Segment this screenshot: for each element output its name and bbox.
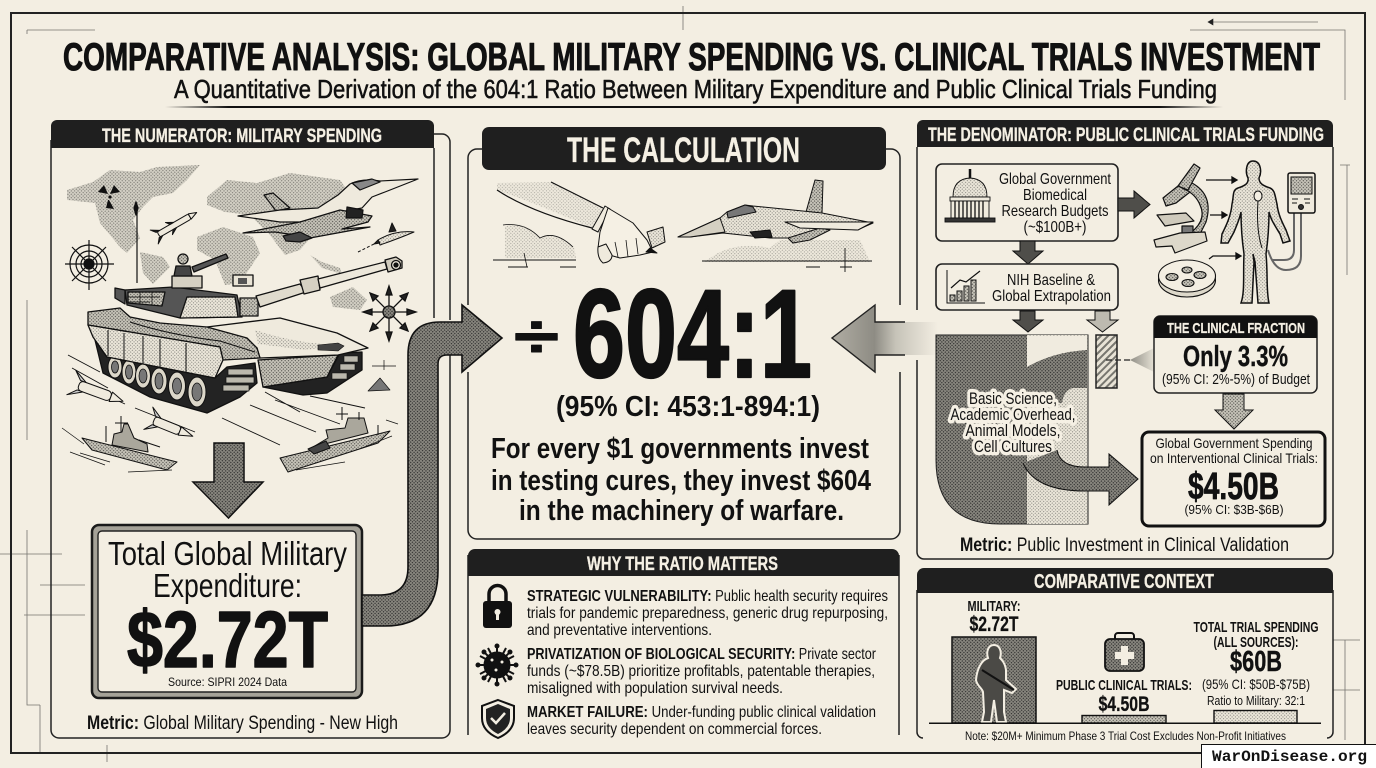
illustration: microscope — [1154, 164, 1208, 253]
box: global government spending: on Interventional Clinical Trials: — [1150, 450, 1318, 466]
box: global budgets: (~$100B+) — [1024, 219, 1086, 236]
arrow: fraction to spending — [1215, 394, 1253, 429]
comparative header — [917, 568, 1333, 593]
symbol: division sign: ÷ — [514, 303, 559, 370]
panel: the numerator — [51, 120, 450, 738]
curved arrow: to public spend — [1023, 450, 1138, 505]
box: global government spending: (95% CI: $3B-$6B) — [1184, 502, 1284, 517]
calculation header — [482, 127, 886, 170]
label: total trial spending — [1194, 619, 1318, 708]
icon: virus — [476, 644, 518, 686]
statement — [491, 433, 871, 527]
illustration: right warship — [280, 407, 398, 472]
bar: total trial spending — [1214, 710, 1297, 723]
label: total trial spending: (95% CI: $50B-$75B) — [1202, 676, 1310, 692]
box: the clinical fraction: THE CLINICAL FRACTION — [1167, 320, 1305, 337]
arrow: denominator to calculation — [832, 305, 938, 372]
illustration: gloved hand — [493, 182, 665, 267]
text: privatization: misaligned with population survival needs. — [527, 680, 783, 697]
dashed arrow: fraction to sliver — [1106, 348, 1154, 372]
box: global government spending — [1142, 432, 1325, 526]
statement: For every $1 governments invest — [491, 433, 869, 465]
illustration: tank — [68, 202, 402, 445]
illustration: small missile upper — [150, 206, 201, 244]
baseline — [929, 722, 1321, 724]
illustration: missile lower left — [67, 370, 127, 414]
panel: comparative context — [917, 568, 1333, 743]
metric: military: Metric: Global Military Spending - New High — [87, 713, 398, 734]
near track — [95, 340, 257, 413]
illustration: fighter jet — [238, 179, 418, 242]
text: basic science label — [950, 390, 1076, 456]
text: strategic vulnerability: and preventative interventions. — [527, 622, 712, 639]
bar: public clinical trials — [1082, 716, 1166, 723]
why header: WHY THE RATIO MATTERS — [587, 554, 778, 575]
label: public clinical trials: $4.50B — [1098, 693, 1150, 716]
text: basic science label: Cell Cultures — [974, 438, 1052, 456]
illustration: cruise missile right — [358, 223, 414, 252]
confidence interval: (95% CI: 453:1-894:1) — [556, 391, 820, 423]
total expenditure box: Total Global Military — [108, 535, 347, 572]
box: global government spending: Global Government Spending — [1156, 435, 1312, 451]
box: NIH baseline: Global Extrapolation — [992, 288, 1111, 305]
bar: military with soldier — [952, 637, 1036, 723]
why header — [468, 549, 899, 576]
text: strategic vulnerability — [527, 588, 888, 639]
subtitle: A Quantitative Derivation of the 604:1 Ratio Between Military Expenditure and Public Clinical Trials Funding — [174, 74, 1217, 104]
total expenditure box: Source: SIPRI 2024 Data — [168, 675, 287, 689]
label: public clinical trials — [1056, 677, 1192, 716]
box: global government spending: $4.50B — [1188, 466, 1279, 508]
box: global budgets: Biomedical — [1023, 187, 1087, 204]
numerator header — [51, 120, 434, 148]
icon: spiked star — [363, 286, 416, 341]
text: strategic vulnerability: trials for pandemic preparedness, generic drug repurposing, — [527, 605, 888, 622]
icon: radiation symbol — [98, 185, 120, 209]
total expenditure box: Expenditure: — [153, 567, 302, 604]
text: strategic vulnerability: STRATEGIC VULNERABILITY: Public health security requires — [527, 588, 888, 605]
box: global budgets: Research Budgets — [1002, 203, 1108, 220]
label: total trial spending: $60B — [1230, 646, 1282, 678]
text: market failure: leaves security dependent on commercial forces. — [527, 721, 822, 738]
deck — [207, 318, 368, 358]
text: privatization — [527, 646, 877, 697]
total expenditure box: $2.72T — [127, 595, 328, 684]
website badge: WarOnDisease.org — [1212, 748, 1367, 766]
ratio: 604:1: 604:1 — [573, 265, 812, 404]
budget breakdown block — [936, 335, 1088, 524]
illustration: missile lower centre — [144, 407, 197, 447]
illustration: petri dish — [1158, 260, 1216, 297]
arrow: budgets to NIH — [1013, 241, 1043, 264]
icon: medical kit — [1105, 633, 1144, 671]
website badge — [1202, 744, 1376, 768]
label: military: MILITARY: — [968, 599, 1020, 615]
comparative header: COMPARATIVE CONTEXT — [1034, 571, 1214, 593]
illustration: monitor device — [1268, 173, 1315, 270]
label: public clinical trials: PUBLIC CLINICAL TRIALS: — [1056, 677, 1192, 694]
arrow: NIH to basic science — [1013, 311, 1043, 332]
label: total trial spending: TOTAL TRIAL SPENDING — [1194, 619, 1318, 636]
illustration: human body — [1221, 161, 1290, 303]
box: global budgets: Global Government — [999, 171, 1111, 188]
turret — [115, 288, 125, 304]
metric: public investment: Metric: Public Investment in Clinical Validation — [960, 535, 1289, 556]
skirt — [88, 325, 223, 378]
title rule — [165, 106, 1223, 108]
calculation header: THE CALCULATION — [567, 131, 800, 170]
statement: in testing cures, they invest $604 — [491, 465, 871, 497]
text: basic science label: Basic Science, — [969, 390, 1057, 408]
label: military: $2.72T — [970, 613, 1019, 636]
arrow: numerator to calculation — [362, 305, 502, 626]
arrow: budgets to research — [1118, 191, 1150, 218]
text: market failure: MARKET FAILURE: Under-funding public clinical validation — [527, 704, 876, 721]
box: NIH baseline: NIH Baseline & — [1007, 272, 1095, 289]
statement: in the machinery of warfare. — [519, 495, 844, 527]
text: market failure — [527, 704, 876, 738]
box: NIH baseline — [936, 264, 1118, 310]
text: privatization: PRIVATIZATION OF BIOLOGICAL SECURITY: Private sector — [527, 646, 877, 663]
arrow: down to total — [193, 443, 263, 518]
icon: shield — [482, 700, 514, 738]
illustration: world map — [67, 165, 367, 310]
panel: why the ratio matters — [468, 549, 899, 738]
label: military — [968, 599, 1020, 636]
small arrows to body — [1206, 177, 1241, 259]
icon: growth chart — [947, 270, 985, 303]
arrow: NIH to clinical sliver — [1087, 311, 1118, 332]
text: basic science label: Academic Overhead, — [950, 406, 1076, 424]
box: the clinical fraction: Only 3.3% — [1183, 341, 1288, 373]
box: the clinical fraction: (95% CI: 2%-5%) of Budget — [1162, 371, 1311, 388]
illustration: left warship — [62, 416, 177, 472]
icon: target reticle — [65, 240, 114, 290]
text: privatization: funds (~$78.5B) prioritize profitabls, patentable therapies, — [527, 663, 875, 680]
icon: lock — [483, 586, 512, 628]
total expenditure box — [92, 525, 362, 698]
illustration: jet in calculation panel — [678, 180, 873, 272]
illustration: small island — [368, 360, 396, 391]
text: basic science label: Animal Models, — [966, 422, 1060, 440]
hull strip — [88, 308, 260, 360]
panel: the calculation — [468, 127, 900, 539]
label: total trial spending: Ratio to Military: 32:1 — [1207, 693, 1305, 708]
note: Note: $20M+ Minimum Phase 3 Trial Cost Excludes Non-Profit Initiatives — [965, 729, 1286, 743]
far track — [263, 352, 362, 395]
label: total trial spending: (ALL SOURCES): — [1214, 634, 1298, 651]
clinical sliver — [1096, 335, 1117, 388]
box: the clinical fraction — [1154, 316, 1317, 393]
numerator header: THE NUMERATOR: MILITARY SPENDING — [102, 125, 382, 147]
panel: the denominator — [917, 120, 1333, 559]
box: global budgets — [936, 164, 1118, 241]
icon: capitol building — [945, 169, 995, 222]
